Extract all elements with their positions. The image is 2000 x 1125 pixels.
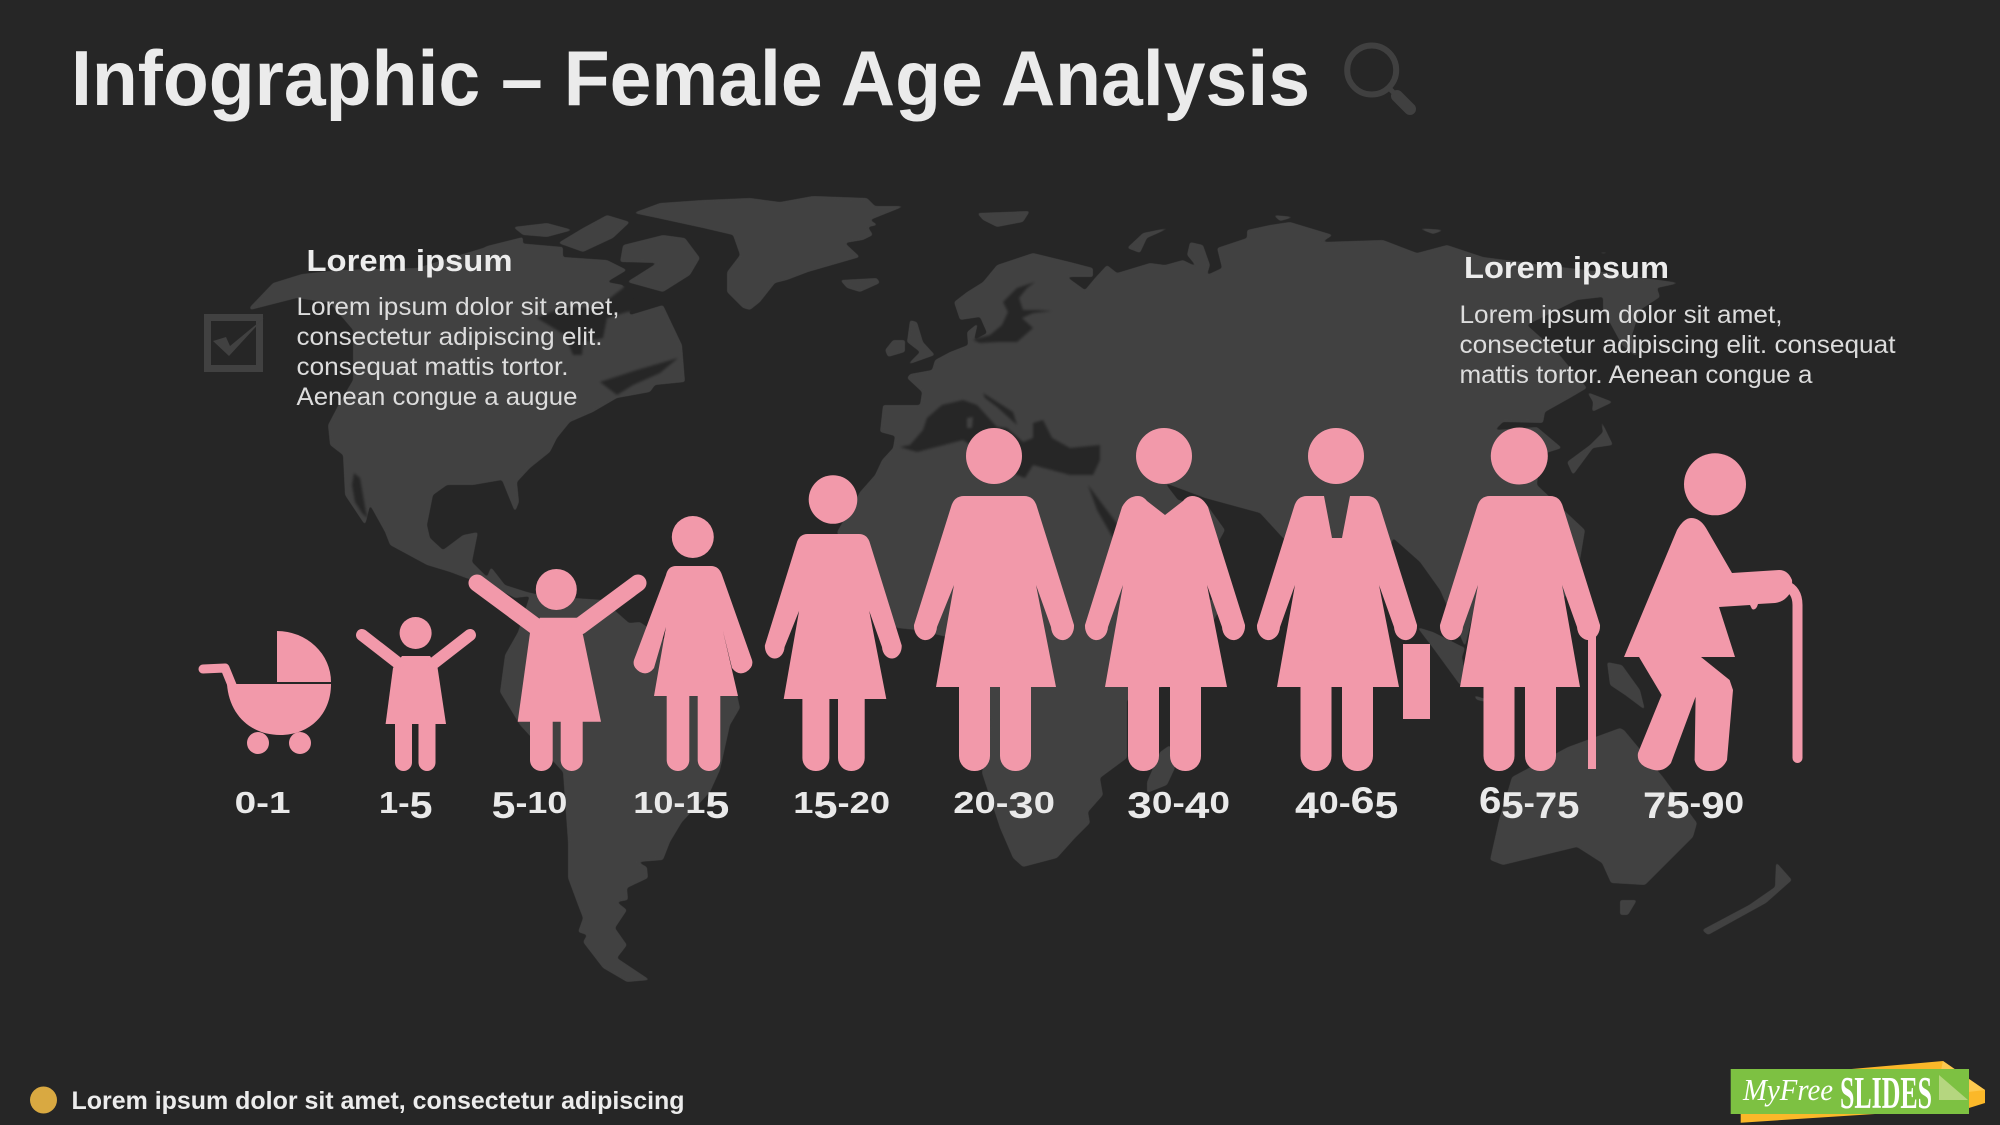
Japan and Sakhalin xyxy=(1567,392,1613,475)
label 15-20: -20 xyxy=(838,785,890,820)
figure: woman 30-40 with V neck xyxy=(1085,428,1245,771)
icon: baby pram 0-1 xyxy=(203,631,331,754)
label 30-40: 0- xyxy=(1152,785,1185,820)
label 5-10: 5 xyxy=(492,785,515,826)
footer note xyxy=(30,1086,684,1115)
logo wordmark My Free: MyFree xyxy=(1742,1072,1833,1107)
label 5-10: -10 xyxy=(515,785,567,820)
right body text xyxy=(1460,301,1896,389)
label 10-15: 10-1 xyxy=(633,785,695,820)
title: Infographic – Female Age Analysis xyxy=(71,34,1310,122)
British Isles xyxy=(885,320,935,365)
figure: child 1-5 xyxy=(362,617,470,771)
world map xyxy=(250,196,1792,982)
right body text: mattis tortor. Aenean congue a xyxy=(1460,361,1813,389)
figure: girl 10-15 xyxy=(634,516,752,771)
label 75-90: 9 xyxy=(1701,785,1724,826)
icon: magnifying glass xyxy=(1347,46,1410,109)
figure: woman 20-30 xyxy=(914,428,1074,771)
label 0-1: 0-1 xyxy=(235,785,291,820)
Svalbard and Novaya Zemlya xyxy=(977,211,1613,254)
Australia xyxy=(1490,728,1697,885)
age labels xyxy=(235,780,1744,826)
label 10-15: 5 xyxy=(705,785,729,826)
North America xyxy=(250,243,685,598)
label 20-30: 20- xyxy=(953,785,998,820)
label 75-90: 75 xyxy=(1643,785,1690,826)
figure: business woman 40-65 xyxy=(1257,428,1430,771)
label 1-5: 5 xyxy=(410,785,432,826)
label 15-20: 5 xyxy=(813,785,838,826)
Eurasia and Africa xyxy=(837,222,1680,867)
label 30-40: 3 xyxy=(1127,785,1152,826)
right heading: Lorem ipsum xyxy=(1464,250,1669,285)
label 1-5: 1- xyxy=(379,785,407,820)
label 75-90: 0 xyxy=(1724,785,1744,820)
Iceland xyxy=(840,278,880,292)
left body text: consequat mattis tortor. xyxy=(296,353,568,381)
right body text: consectetur adipiscing elit. consequat xyxy=(1460,331,1896,359)
figure: child 5-10 xyxy=(477,569,638,771)
icon: briefcase xyxy=(1403,644,1430,719)
label 20-30: 3 xyxy=(1008,785,1034,826)
logo: MyFreeSlides xyxy=(1731,1061,1985,1123)
icon: checkbox xyxy=(208,318,264,368)
label 40-65: 0- xyxy=(1319,785,1351,820)
label 30-40: 0 xyxy=(1209,785,1230,820)
label 40-65: 5 xyxy=(1374,785,1398,826)
figure: teen 15-20 xyxy=(765,475,902,771)
left body text: consectetur adipiscing elit. xyxy=(296,323,602,351)
Madagascar xyxy=(1147,745,1175,793)
label 65-75: - xyxy=(1524,785,1535,820)
Sumatra and Java xyxy=(1417,627,1520,710)
Arctic islands xyxy=(483,215,700,292)
label 65-75: 5 xyxy=(1501,785,1524,826)
label 40-65: 4 xyxy=(1295,785,1319,826)
Corsica xyxy=(967,417,973,428)
icon: cane xyxy=(1588,636,1596,769)
figure: elderly woman 75-90 xyxy=(1624,453,1798,771)
logo wordmark Slides: SLIDES xyxy=(1840,1068,1932,1118)
label 65-75: 6 xyxy=(1479,780,1501,821)
text block: left xyxy=(296,243,620,411)
Tasmania and New Zealand xyxy=(1620,862,1792,935)
icon: yellow bullet xyxy=(30,1086,57,1114)
label 40-65: 6 xyxy=(1351,780,1374,821)
right body text: Lorem ipsum dolor sit amet, xyxy=(1460,301,1782,329)
label 75-90: - xyxy=(1690,785,1701,820)
left body text xyxy=(296,293,620,411)
footer text: Lorem ipsum dolor sit amet, consectetur adipiscing xyxy=(72,1087,684,1115)
seas cut out of the land xyxy=(352,282,1135,565)
text block: right xyxy=(1460,250,1896,389)
left body text: Lorem ipsum dolor sit amet, xyxy=(296,293,620,321)
left heading: Lorem ipsum xyxy=(306,243,512,278)
New Guinea xyxy=(1607,662,1645,710)
figure: woman with cane 65-75 xyxy=(1440,428,1600,771)
label 15-20: 1 xyxy=(793,785,811,820)
label 20-30: 0 xyxy=(1034,785,1055,820)
Greenland xyxy=(633,196,905,310)
label 30-40: 4 xyxy=(1185,785,1210,826)
South America xyxy=(500,595,740,982)
left body text: Aenean congue a augue xyxy=(296,383,578,411)
label 65-75: 75 xyxy=(1535,785,1580,826)
figures: age groups xyxy=(203,428,1798,771)
